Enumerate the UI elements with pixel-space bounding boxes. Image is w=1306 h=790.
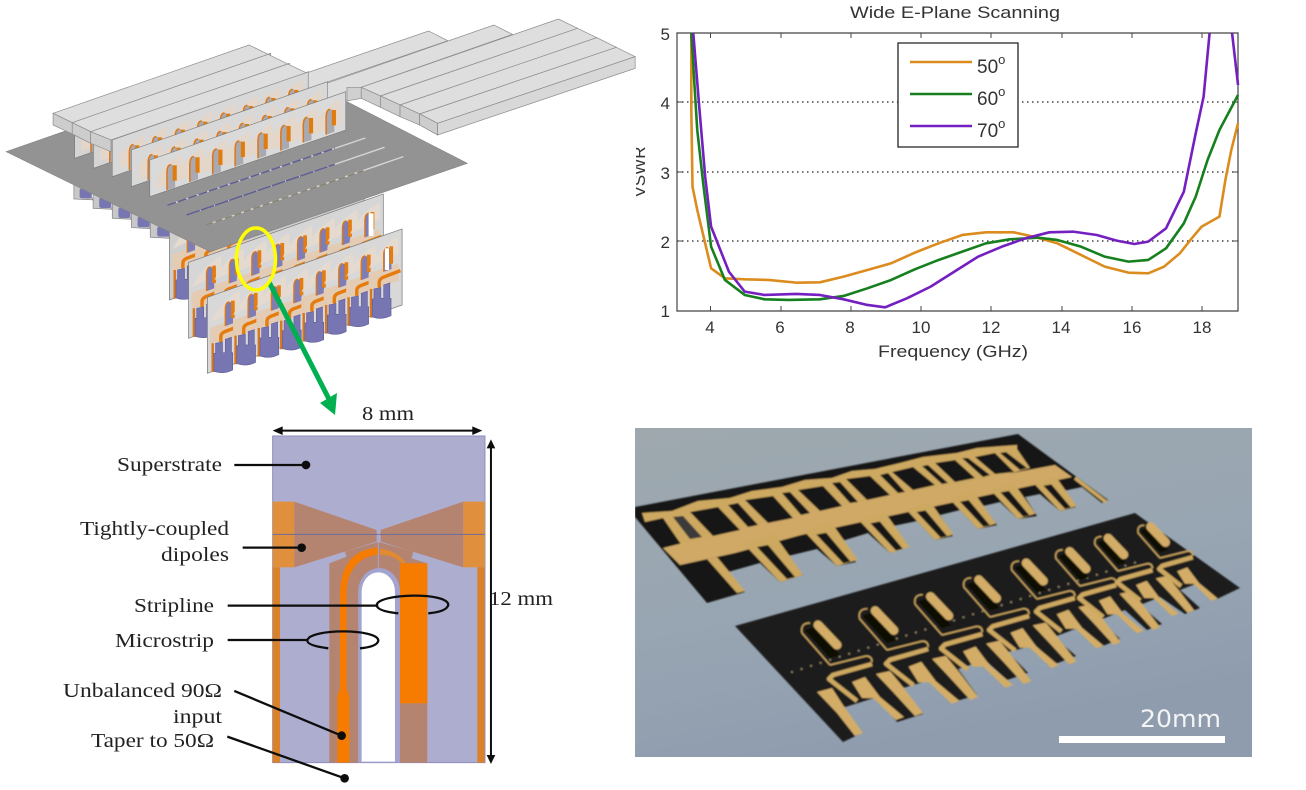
diagram labels: Unbalanced 90Ω xyxy=(63,680,222,702)
y-axis tick labels xyxy=(661,25,670,321)
axes and ticks xyxy=(677,33,1238,311)
y-axis tick labels: 1 xyxy=(661,302,670,321)
x-axis tick labels: 12 xyxy=(982,318,1000,337)
y-axis tick labels: 3 xyxy=(661,164,670,183)
curve: 50 degrees xyxy=(691,33,1238,283)
diagram labels: Taper to 50Ω xyxy=(91,730,214,752)
curves xyxy=(691,33,1238,307)
y-axis tick labels: 4 xyxy=(661,94,670,113)
green arrow to unit cell xyxy=(269,282,337,415)
x-axis title: Frequency (GHz) xyxy=(878,342,1028,361)
legend: 70 xyxy=(977,121,998,142)
x-axis tick labels: 8 xyxy=(845,318,855,337)
diagram labels: Stripline xyxy=(134,595,214,617)
side metal pads xyxy=(273,502,485,763)
hanging card stubs xyxy=(74,180,170,238)
lower board xyxy=(735,513,1240,742)
photo background xyxy=(635,428,1252,757)
diagram labels: 12 mm xyxy=(489,588,553,610)
panel: unit cell diagram xyxy=(63,403,553,783)
chart: Wide E-Plane Scanning VSWR xyxy=(630,3,1238,361)
plane slots xyxy=(167,138,403,225)
x-axis tick labels: 18 xyxy=(1193,318,1211,337)
x-axis tick labels: 16 xyxy=(1123,318,1141,337)
y-axis tick labels: 2 xyxy=(661,233,670,252)
panel: fabricated board photo xyxy=(635,428,1252,757)
scale bar: 20mm xyxy=(1140,705,1221,733)
stripline feed xyxy=(337,548,427,763)
back and middle top blocks xyxy=(233,19,635,135)
x-axis tick labels: 4 xyxy=(705,318,715,337)
legend xyxy=(898,43,1018,147)
diagram labels: input xyxy=(173,706,223,728)
superstrate xyxy=(273,436,485,763)
diagram labels: Superstrate xyxy=(117,454,222,476)
legend: o xyxy=(998,52,1005,67)
chart title: Wide E-Plane Scanning xyxy=(850,3,1060,22)
left top blocks xyxy=(53,45,306,152)
x-axis tick labels: 6 xyxy=(775,318,785,337)
legend: 50 xyxy=(977,57,998,78)
scale bar xyxy=(1059,705,1225,743)
dotted grid lines xyxy=(677,102,1238,241)
curve: 60 degrees xyxy=(691,33,1238,300)
diagram labels: 8 mm xyxy=(362,403,414,425)
y-axis tick labels: 5 xyxy=(661,25,670,44)
clipped y-axis label: VSWR xyxy=(630,146,649,198)
tightly-coupled dipole arms xyxy=(294,502,463,763)
legend: o xyxy=(998,84,1005,99)
ground plane xyxy=(6,74,467,252)
diagram labels xyxy=(63,403,553,752)
x-axis tick labels: 10 xyxy=(912,318,930,337)
yellow highlight ellipse xyxy=(236,228,276,290)
upper board xyxy=(635,434,1108,603)
diagram labels: Tightly-coupled xyxy=(80,518,229,540)
x-axis tick labels: 14 xyxy=(1052,318,1070,337)
legend: 60 xyxy=(977,89,998,110)
diagram labels: dipoles xyxy=(161,544,229,566)
dimension arrows xyxy=(273,426,495,764)
upper antenna cards xyxy=(75,53,346,197)
legend: o xyxy=(998,116,1005,131)
center slot xyxy=(358,568,400,763)
leader lines and callout ellipses xyxy=(227,465,448,778)
dipole centre lines xyxy=(273,534,485,568)
leader dots xyxy=(297,461,349,783)
diagram labels: Microstrip xyxy=(115,630,214,652)
panel: 3D antenna array model xyxy=(6,19,635,373)
lower antenna cards xyxy=(169,156,402,373)
curve: 70 degrees xyxy=(693,33,1238,307)
x-axis tick labels xyxy=(705,318,1211,337)
